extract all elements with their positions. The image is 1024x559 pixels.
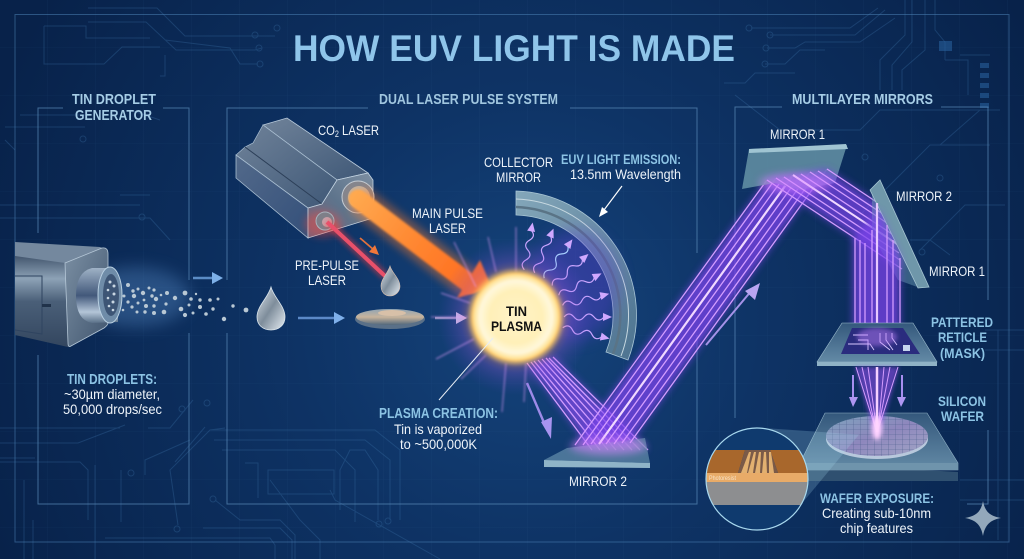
beam: reticle to wafer <box>855 367 899 440</box>
label: main pulse laser: LASER <box>429 220 466 236</box>
tin plasma: TIN <box>506 303 527 319</box>
arrow: upward beam direction <box>706 283 760 345</box>
heading: multilayer mirrors: MULTILAYER MIRRORS <box>792 92 933 108</box>
label: patterned reticle: RETICLE <box>938 329 987 345</box>
heading: dual laser pulse system: DUAL LASER PULSE SYSTEM <box>379 92 558 108</box>
callout: wafer exposure: WAFER EXPOSURE: <box>820 490 934 506</box>
label: silicon wafer: SILICON <box>938 393 986 409</box>
callout: plasma creation <box>379 406 498 452</box>
arrow: disc to plasma <box>435 312 467 324</box>
callout: EUV light emission: 13.5nm Wavelength <box>570 166 681 182</box>
label: mirror 2 right: MIRROR 2 <box>896 188 952 204</box>
label: patterned reticle: PATTERED <box>931 314 993 330</box>
arrow: incoming to mirror 2 <box>527 383 552 439</box>
icon: flattened tin disc <box>355 309 425 329</box>
callout: EUV light emission <box>561 151 681 182</box>
title: HOW EUV LIGHT IS MADE <box>293 28 735 69</box>
callout: wafer exposure: Creating sub-10nm <box>822 505 931 521</box>
label: main pulse laser: MAIN PULSE <box>412 205 483 221</box>
magnifier: cross-section of features: Photoresist <box>709 476 736 482</box>
label: patterned reticle <box>931 314 993 361</box>
callout: wafer exposure: chip features <box>840 520 913 536</box>
icon: CO2 laser <box>236 118 374 238</box>
label: silicon wafer: WAFER <box>941 408 984 424</box>
arrow: EUV callout to mirror <box>599 186 622 217</box>
tin plasma: PLASMA <box>491 318 542 334</box>
callout: plasma creation: PLASMA CREATION: <box>379 406 498 422</box>
label: silicon wafer <box>938 393 986 424</box>
label: CO2 laser: LASER <box>339 122 379 138</box>
label: mirror 1 upper: MIRROR 1 <box>770 126 825 142</box>
arrow: droplet to disc <box>298 312 345 324</box>
EUV light waves <box>520 222 620 342</box>
heading: tin droplet generator <box>72 91 156 124</box>
icon: small droplet <box>381 266 400 296</box>
label: patterned reticle: (MASK) <box>940 345 985 361</box>
text: tin droplets note: ~30µm diameter, <box>64 386 160 402</box>
beam: lower mirror 2 to upper mirror 1 <box>575 169 827 445</box>
icon: sparkle <box>965 501 1001 536</box>
tin plasma <box>431 227 594 412</box>
arrow: pre-pulse direction <box>360 238 379 255</box>
beam: upper mirror 1 to right mirror <box>767 169 902 269</box>
heading: tin droplet generator: TIN DROPLET <box>72 91 156 108</box>
label: collector mirror: COLLECTOR <box>484 154 553 170</box>
beam: plasma to lower mirror 2 <box>527 357 648 450</box>
callout: plasma creation: Tin is vaporized <box>394 421 482 437</box>
text: tin droplets note: 50,000 drops/sec <box>63 401 162 417</box>
callout: plasma creation: to ~500,000K <box>400 436 478 452</box>
collector mirror <box>516 191 636 360</box>
label: collector mirror <box>484 154 553 185</box>
lower mirror 2 <box>544 438 650 468</box>
crossing glow on upper mirror <box>759 173 831 193</box>
label: collector mirror: MIRROR <box>496 169 541 185</box>
main pulse laser beam <box>358 199 492 298</box>
text: tin droplets note <box>63 372 162 417</box>
heading: tin droplet generator: GENERATOR <box>75 107 152 124</box>
callout: wafer exposure <box>820 490 934 536</box>
label: main pulse laser <box>412 205 483 236</box>
right mirror plate <box>870 180 929 288</box>
label: pre-pulse laser <box>295 257 359 288</box>
callout: EUV light emission: EUV LIGHT EMISSION: <box>561 151 681 167</box>
label: pre-pulse laser: PRE-PULSE <box>295 257 359 273</box>
label: mirror 1 right: MIRROR 1 <box>929 263 985 279</box>
label: CO2 laser: 2 <box>335 129 339 139</box>
label: CO2 laser: CO <box>318 122 339 138</box>
label: pre-pulse laser: LASER <box>308 272 346 288</box>
pre-pulse laser beam <box>327 222 385 276</box>
magnifier: cross-section of features <box>700 428 858 530</box>
callout pointer: plasma creation <box>439 338 493 400</box>
icon: tin droplet <box>257 287 285 330</box>
text: tin droplets note: TIN DROPLETS: <box>67 372 157 388</box>
droplet spray <box>122 283 248 321</box>
panel frames <box>38 107 988 504</box>
beam: right mirror to reticle <box>853 203 900 335</box>
upper mirror 1 <box>742 144 848 190</box>
silicon wafer stage <box>800 412 958 481</box>
arrows: reticle to wafer <box>849 375 906 407</box>
crossing glow on lower mirror <box>570 437 646 455</box>
arrow: droplets to laser zone <box>193 272 223 284</box>
label: mirror 2 lower: MIRROR 2 <box>569 473 627 489</box>
icon: droplet generator <box>15 242 190 347</box>
patterned reticle <box>817 323 937 366</box>
